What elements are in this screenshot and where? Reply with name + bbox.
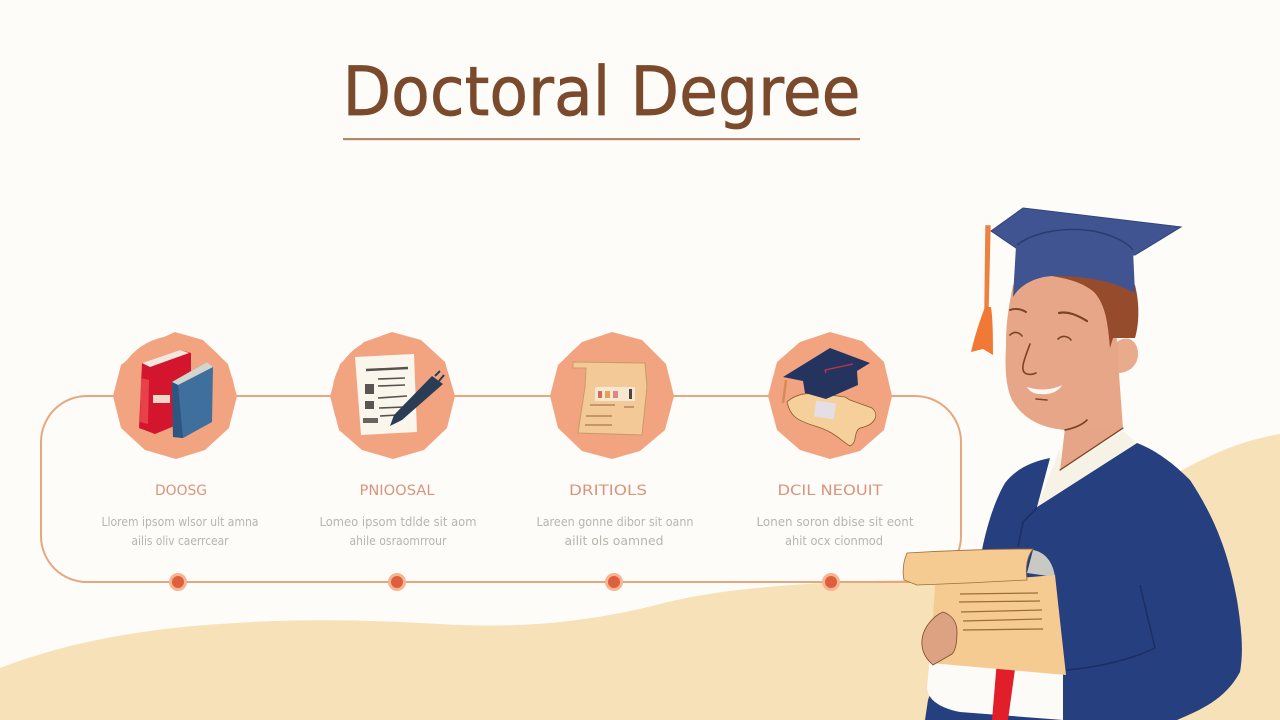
sand wave background xyxy=(0,434,1280,720)
timeline dot xyxy=(822,573,840,591)
step 1: books xyxy=(102,332,258,591)
step description: Lareen gonne dibor sit oann xyxy=(536,515,694,529)
step 2: proposal xyxy=(320,332,476,591)
icon badge xyxy=(113,332,237,459)
ear xyxy=(1114,339,1138,373)
neck xyxy=(1060,360,1123,471)
icon: red book xyxy=(139,350,191,434)
title underline xyxy=(343,138,860,140)
step description: ailis oliv caerrcear xyxy=(132,534,229,548)
step description xyxy=(756,515,914,548)
icon badge xyxy=(330,332,455,459)
hand xyxy=(922,612,957,665)
step label: DOOSG xyxy=(155,483,207,499)
icon: mortarboard xyxy=(783,348,870,403)
step label: DCIL NEOUIT xyxy=(778,483,883,499)
graduate character xyxy=(903,208,1242,720)
step description: ailit ols oamned xyxy=(564,534,664,548)
timeline dot xyxy=(169,573,187,591)
title: Doctoral Degree xyxy=(342,53,860,132)
step description xyxy=(536,515,694,548)
scroll top roll xyxy=(903,549,1033,585)
icon: diploma paper xyxy=(787,393,876,446)
scroll text lines xyxy=(959,593,1043,630)
timeline dot xyxy=(388,573,406,591)
hair xyxy=(1052,270,1138,348)
timeline dot xyxy=(605,573,623,591)
icon: document xyxy=(355,354,417,435)
step description: Llorem ipsom wlsor ult amna xyxy=(102,515,258,529)
icon: pen xyxy=(390,371,444,426)
face xyxy=(1006,268,1122,431)
gown seam and pocket xyxy=(1018,508,1155,670)
step description: ahile osraomrrour xyxy=(350,534,447,548)
facial features xyxy=(1010,309,1123,470)
gown xyxy=(925,443,1242,720)
graduation cap xyxy=(991,208,1181,297)
smile xyxy=(1027,385,1062,394)
icon: scroll xyxy=(573,362,647,435)
scroll rear curl xyxy=(1027,550,1055,577)
tassel xyxy=(971,226,993,355)
icon badge xyxy=(550,332,674,459)
step description xyxy=(320,515,476,548)
step label: PNIOOSAL xyxy=(360,483,435,499)
step 4: doctoral result xyxy=(756,332,914,591)
icon: blue book xyxy=(172,362,213,438)
rolled diploma xyxy=(927,655,1063,720)
step description: ahit ocx cionmod xyxy=(785,534,883,548)
step description: Lomeo ipsom tdlde sit aom xyxy=(320,515,476,529)
timeline track xyxy=(41,396,961,582)
icon badge xyxy=(768,332,892,459)
step description: Lonen soron dbise sit eont xyxy=(756,515,914,529)
step 3: dissertation xyxy=(536,332,694,591)
scroll page xyxy=(930,575,1066,675)
collar xyxy=(1037,431,1137,507)
step label: DRITIOLS xyxy=(569,483,647,499)
step description xyxy=(102,515,258,548)
